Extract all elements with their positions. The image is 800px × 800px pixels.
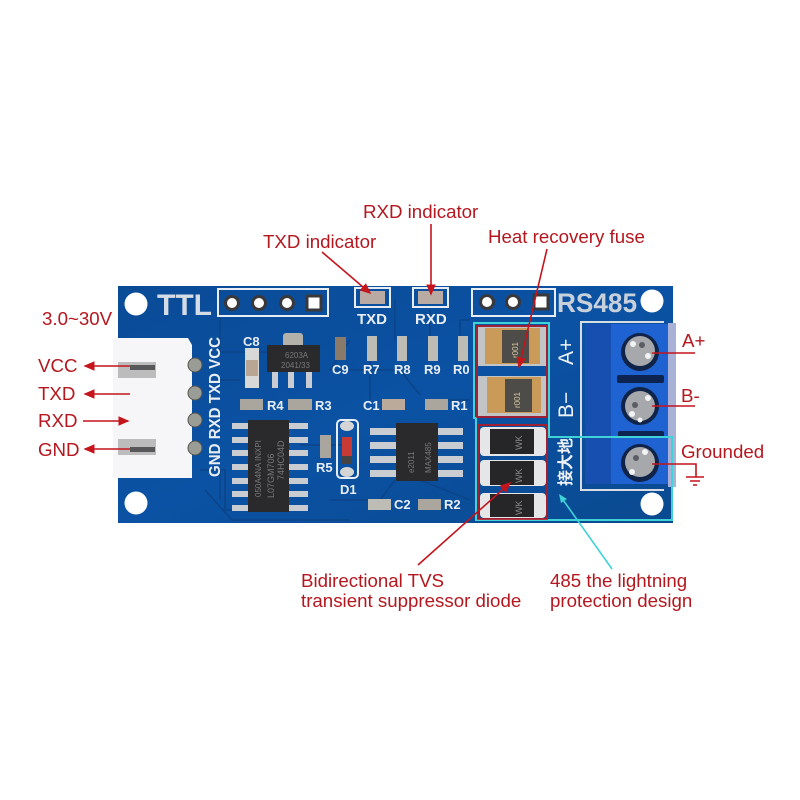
RS485 silkscreen label: RS485 — [557, 288, 637, 318]
chip MAX485: MAX485 — [424, 442, 433, 473]
small components row: R8 — [394, 362, 411, 377]
TTL header pads — [218, 289, 328, 316]
screws — [621, 333, 659, 482]
pin labels: GND RXD TXD VCC — [207, 337, 224, 477]
label and arrow: TVS diode: Bidirectional TVS — [301, 570, 444, 591]
small components row: R2 — [444, 497, 461, 512]
label and arrow: TXD indicator: TXD indicator — [263, 231, 376, 252]
small components row: C9 — [332, 362, 349, 377]
red outline: TVS diodes — [478, 425, 547, 519]
label and ground symbol: Grounded — [652, 441, 764, 485]
ground silkscreen: 接大地 — [557, 438, 575, 486]
terminal block — [581, 322, 676, 490]
label and arrow: B-: B- — [681, 385, 700, 406]
panel: circuit board — [113, 286, 676, 523]
small components row: R9 — [424, 362, 441, 377]
A+ and B- silkscreen: A+ — [555, 339, 578, 365]
RXD LED: RXD — [415, 311, 447, 328]
chip 74HC04D: INXPI — [254, 440, 263, 461]
regulator 6203A: 6203A — [285, 351, 309, 360]
small components row: R1 — [451, 398, 468, 413]
label and arrow: TVS diode — [301, 483, 521, 611]
chip MAX485 — [370, 423, 463, 481]
TVS diodes — [480, 427, 546, 518]
label and arrow: TXD: TXD — [38, 383, 75, 404]
label and arrow: lightning protection — [550, 494, 692, 611]
regulator 6203A: 2041/33 — [281, 361, 310, 370]
connector pins — [188, 358, 202, 455]
label and arrow: A+: A+ — [682, 330, 705, 351]
label and arrow: TVS diode: transient suppressor diode — [301, 590, 521, 611]
small components row: R0 — [453, 362, 470, 377]
label and arrow: A+ — [652, 330, 705, 353]
label and arrow: lightning protection: 485 the lightning — [550, 570, 687, 591]
small components row: R4 — [267, 398, 284, 413]
capacitor C8 — [243, 334, 260, 388]
diode D1 — [337, 420, 358, 497]
TVS diodes: WK — [514, 436, 524, 450]
label and arrow: heat recovery fuse — [488, 226, 645, 367]
TXD LED — [355, 288, 390, 328]
A+ and B- silkscreen: B− — [555, 392, 578, 418]
cyan outline: lightning protection area — [474, 323, 672, 520]
fuses: r001 — [511, 341, 520, 358]
RS485 header pads — [472, 289, 555, 316]
label and ground symbol: Grounded: Grounded — [681, 441, 764, 462]
chip MAX485: e2011 — [407, 451, 416, 473]
TVS diodes: WK — [514, 468, 524, 483]
TVS diodes: WK — [514, 500, 524, 515]
small components row — [240, 336, 470, 512]
chip 74HC04D — [232, 420, 308, 512]
chip 74HC04D: L07GM706 — [266, 453, 276, 498]
label: 3.0~30V: 3.0~30V — [42, 308, 113, 329]
RXD LED — [413, 288, 448, 328]
TXD LED: TXD — [357, 311, 387, 328]
fuses: r001 — [513, 391, 522, 408]
TTL silkscreen label: TTL — [157, 289, 212, 322]
label and arrow: VCC — [38, 355, 130, 376]
JST connector — [113, 338, 192, 478]
chip 74HC04D: 050A4NA — [254, 462, 263, 497]
capacitor C8: C8 — [243, 334, 260, 349]
small components row: R3 — [315, 398, 332, 413]
label and arrow: TXD indicator — [263, 231, 376, 293]
label and arrow: TXD — [38, 383, 130, 404]
label and arrow: GND: GND — [38, 439, 80, 460]
A+ and B- silkscreen — [555, 339, 578, 418]
label and arrow: VCC: VCC — [38, 355, 77, 376]
label and arrow: RXD: RXD — [38, 410, 77, 431]
mounting holes — [124, 290, 664, 516]
label and arrow: RXD indicator — [363, 201, 478, 294]
small components row: C2 — [394, 497, 411, 512]
red outline: fuses — [477, 326, 547, 417]
fuses — [478, 327, 546, 416]
label and arrow: lightning protection: protection design — [550, 590, 692, 611]
diode D1: D1 — [340, 482, 357, 497]
small components row: R7 — [363, 362, 380, 377]
label and arrow: GND — [38, 439, 130, 460]
regulator 6203A — [267, 333, 320, 388]
label and arrow: RXD — [38, 410, 128, 431]
label and arrow: RXD indicator: RXD indicator — [363, 201, 478, 222]
label and arrow: heat recovery fuse: Heat recovery fuse — [488, 226, 645, 247]
small components row: C1 — [363, 398, 380, 413]
label and arrow: B- — [652, 385, 700, 406]
chip 74HC04D: 74HC04D — [276, 440, 286, 480]
small components row: R5 — [316, 460, 333, 475]
